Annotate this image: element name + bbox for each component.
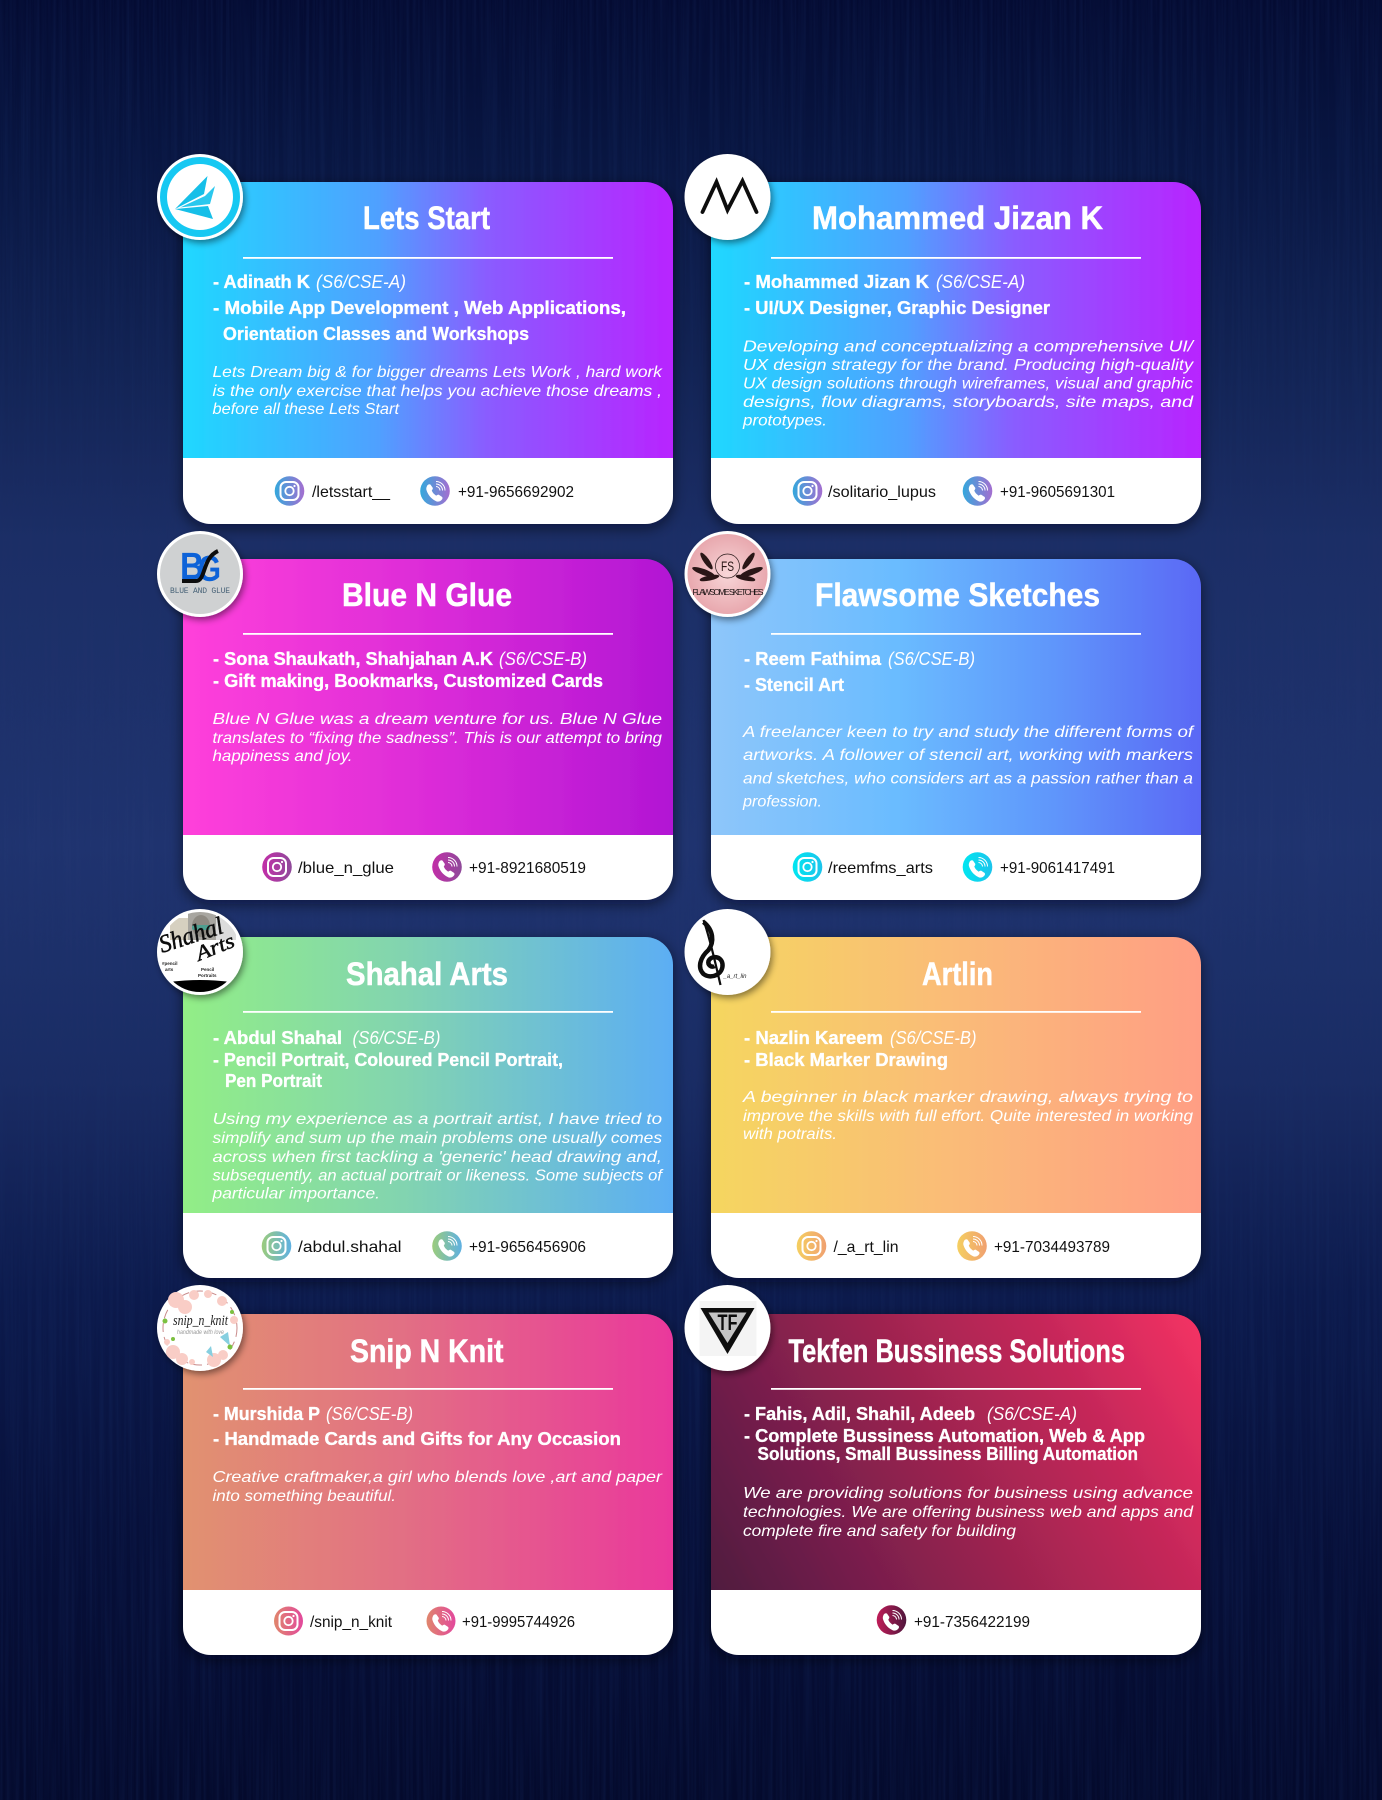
description: A beginner in black marker drawing, always trying to	[742, 1089, 1193, 1106]
founder: (S6/CSE-A)	[316, 271, 406, 292]
contact: phone	[957, 1231, 1110, 1261]
founder	[213, 271, 406, 292]
founder: (S6/CSE-B)	[326, 1403, 413, 1424]
description: is the only exercise that helps you achieve those dreams ,	[212, 383, 662, 400]
description: Using my experience as a portrait artist, I have tried to	[212, 1111, 662, 1128]
contact: phone	[420, 476, 574, 506]
description	[742, 724, 1195, 810]
services: - Gift making, Bookmarks, Customized Cards	[213, 670, 603, 691]
heading: Tekfen Bussiness Solutions	[788, 1333, 1125, 1369]
contact: instagram	[797, 1231, 898, 1261]
contact: instagram	[793, 852, 933, 882]
heading: Lets Start	[363, 200, 490, 236]
card shape	[711, 559, 1201, 900]
description: subsequently, an actual portrait or likeness. Some subjects of	[212, 1168, 664, 1184]
contact: phone	[432, 852, 586, 882]
founder	[213, 1027, 440, 1048]
description	[212, 1469, 663, 1505]
heading: Flawsome Sketches	[815, 577, 1100, 613]
description: Lets Dream big & for bigger dreams Lets Work , hard work	[212, 364, 663, 381]
heading: Shahal Arts	[346, 956, 508, 992]
founder: - Adinath K	[213, 271, 311, 292]
description: with potraits.	[743, 1126, 837, 1143]
contact: instagram	[793, 476, 936, 506]
logo: Shahal Arts: arts	[165, 967, 174, 972]
card shape	[183, 182, 673, 524]
founder: (S6/CSE-B)	[890, 1027, 976, 1048]
services	[744, 1425, 1145, 1464]
contact: phone: +91-9605691301	[1000, 484, 1115, 501]
founder: - Murshida P	[213, 1403, 320, 1424]
description	[211, 1111, 664, 1202]
contact: instagram	[262, 852, 394, 882]
description: designs, flow diagrams, storyboards, site maps, and	[743, 394, 1194, 411]
divider	[243, 1388, 613, 1390]
founder: - Mohammed Jizan K	[744, 271, 930, 292]
contact: phone: +91-9656456906	[469, 1239, 586, 1256]
contact: phone: +91-9995744926	[462, 1614, 575, 1631]
panel: Artlin	[684, 909, 1201, 1278]
description: simplify and sum up the main problems one usually comes	[212, 1130, 662, 1147]
logo: Snip N Knit wreath	[157, 1285, 243, 1371]
panel: Shahal Arts	[156, 909, 673, 1278]
logo: Shahal Arts	[156, 909, 243, 995]
card shape	[183, 1314, 673, 1655]
logo: Shahal Arts: Shahal	[156, 913, 227, 959]
logo: Artlin clef	[684, 909, 770, 995]
founder: (S6/CSE-A)	[936, 271, 1025, 292]
contact: phone	[963, 476, 1115, 506]
services: - Mobile App Development , Web Applications,	[213, 297, 626, 318]
description: Developing and conceptualizing a comprehensive UI/	[743, 338, 1195, 356]
services: - UI/UX Designer, Graphic Designer	[744, 297, 1050, 318]
logo: Snip N Knit wreath: snip_n_knit	[173, 1313, 229, 1329]
description: artworks. A follower of stencil art, working with markers	[743, 747, 1193, 764]
logo: Blue and Glue: G	[198, 548, 221, 589]
logo: Artlin clef: _a_rt_lin	[722, 974, 747, 980]
logo: Blue and Glue	[157, 531, 243, 617]
services: Orientation Classes and Workshops	[223, 323, 529, 344]
description: Creative craftmaker,a girl who blends love ,art and paper	[212, 1469, 663, 1486]
founder: (S6/CSE-A)	[987, 1403, 1077, 1424]
description: before all these Lets Start	[212, 401, 400, 418]
services: - Pencil Portrait, Coloured Pencil Portrait,	[213, 1049, 563, 1070]
description: across when first tackling a 'generic' head drawing and,	[212, 1149, 662, 1166]
description	[212, 711, 662, 765]
description: UX design solutions through wireframes, visual and graphic	[743, 376, 1193, 392]
contact: instagram: /_a_rt_lin	[834, 1239, 898, 1256]
logo: Blue and Glue: B	[180, 546, 204, 588]
contact: phone	[963, 852, 1115, 882]
description	[212, 364, 663, 418]
description: profession.	[742, 794, 822, 810]
description: A freelancer keen to try and study the different forms of	[742, 724, 1195, 741]
card shape	[711, 1314, 1201, 1655]
divider	[243, 257, 613, 259]
founder	[744, 271, 1025, 292]
description: We are providing solutions for business using advance	[743, 1485, 1193, 1502]
founder: (S6/CSE-B)	[499, 648, 587, 669]
founder: (S6/CSE-B)	[888, 648, 975, 669]
panel: Blue N Glue	[157, 531, 673, 900]
description: Blue N Glue was a dream venture for us. Blue N Glue	[212, 711, 662, 728]
services	[213, 297, 626, 344]
contact: phone: +91-8921680519	[469, 860, 586, 877]
description	[742, 338, 1195, 430]
services: - Complete Bussiness Automation, Web & App	[744, 1425, 1145, 1446]
logo: Tekfen triangle: TF	[718, 1310, 738, 1335]
heading: Blue N Glue	[342, 577, 512, 613]
contact: phone: +91-7034493789	[994, 1239, 1110, 1256]
logo: Shahal Arts: Portraits	[198, 973, 217, 978]
divider	[771, 1388, 1141, 1390]
description: improve the skills with full effort. Quite interested in working	[743, 1108, 1193, 1125]
founder	[213, 1403, 413, 1424]
description: technologies. We are offering business web and apps and	[743, 1504, 1194, 1521]
description: particular importance.	[211, 1186, 380, 1202]
services: - Stencil Art	[744, 674, 844, 695]
founder: - Reem Fathima	[744, 648, 882, 669]
contact: phone	[877, 1605, 1030, 1635]
card shape	[183, 937, 673, 1278]
founder	[744, 648, 975, 669]
description: complete fire and safety for building	[743, 1523, 1016, 1540]
contact: phone: +91-7356422199	[914, 1614, 1030, 1631]
logo: paper plane	[157, 154, 243, 240]
card shape	[183, 559, 673, 900]
divider	[243, 633, 613, 635]
contact: instagram	[274, 1606, 393, 1636]
contact: phone: +91-9656692902	[458, 484, 574, 501]
founder: - Fahis, Adil, Shahil, Adeeb	[744, 1403, 975, 1424]
panel: Tekfen Bussiness Solutions	[684, 1285, 1201, 1655]
panel: Snip N Knit	[157, 1285, 673, 1655]
logo: Flawsome Sketches: FS	[721, 558, 734, 574]
heading: Mohammed Jizan K	[812, 200, 1103, 236]
contact: instagram: /abdul.shahal	[298, 1239, 402, 1256]
contact: instagram: /letsstart__	[312, 484, 391, 501]
founder: - Sona Shaukath, Shahjahan A.K	[213, 648, 494, 669]
logo: Shahal Arts: Pencil	[201, 967, 214, 972]
divider	[771, 633, 1141, 635]
logo: MN mark	[684, 154, 770, 240]
panel: Flawsome Sketches	[684, 531, 1201, 900]
description: and sketches, who considers art as a passion rather than a	[743, 770, 1193, 788]
logo: Shahal Arts: Arts	[190, 928, 238, 966]
contact: instagram: /solitario_lupus	[828, 484, 936, 501]
contact: instagram: /blue_n_glue	[298, 860, 394, 877]
services: Solutions, Small Bussiness Billing Automation	[758, 1443, 1138, 1464]
contact: instagram	[275, 476, 391, 506]
panel: Mohammed Jizan K	[684, 154, 1201, 524]
description: UX design strategy for the brand. Producing high-quality	[743, 357, 1194, 374]
divider	[771, 1011, 1141, 1013]
services: Pen Portrait	[225, 1070, 322, 1091]
founder: - Nazlin Kareem	[744, 1027, 883, 1048]
contact: instagram	[262, 1231, 402, 1261]
card shape	[711, 937, 1201, 1278]
contact: phone	[432, 1231, 586, 1261]
founder: (S6/CSE-B)	[352, 1027, 440, 1048]
heading: Snip N Knit	[350, 1333, 504, 1369]
description: into something beautiful.	[212, 1488, 396, 1505]
divider	[771, 257, 1141, 259]
card shape	[711, 182, 1201, 524]
divider	[243, 1011, 613, 1013]
panel: Lets Start	[157, 154, 673, 524]
logo: Tekfen triangle	[684, 1285, 770, 1371]
description	[742, 1089, 1193, 1143]
description	[743, 1485, 1194, 1540]
logo: Shahal Arts: #pencil	[162, 961, 178, 966]
founder: - Abdul Shahal	[213, 1027, 342, 1048]
services: - Black Marker Drawing	[744, 1049, 948, 1070]
founder	[744, 1027, 976, 1048]
contact: instagram: /snip_n_knit	[310, 1614, 393, 1631]
logo: Blue and Glue: BLUE AND GLUE	[170, 587, 230, 596]
contact: phone: +91-9061417491	[1000, 860, 1115, 877]
contact: instagram: /reemfms_arts	[828, 860, 933, 877]
logo: Flawsome Sketches	[684, 531, 770, 617]
logo: Snip N Knit wreath: handmade with love	[177, 1330, 225, 1336]
services	[213, 1049, 563, 1091]
description: happiness and joy.	[212, 748, 352, 765]
description: translates to “fixing the sadness”. This is our attempt to bring	[212, 730, 662, 747]
heading: Artlin	[922, 956, 993, 992]
description: prototypes.	[742, 412, 827, 430]
services: - Handmade Cards and Gifts for Any Occasion	[213, 1428, 621, 1449]
contact: phone	[426, 1606, 575, 1636]
logo: Flawsome Sketches: FLAWSOME SKETCHES	[692, 587, 764, 597]
